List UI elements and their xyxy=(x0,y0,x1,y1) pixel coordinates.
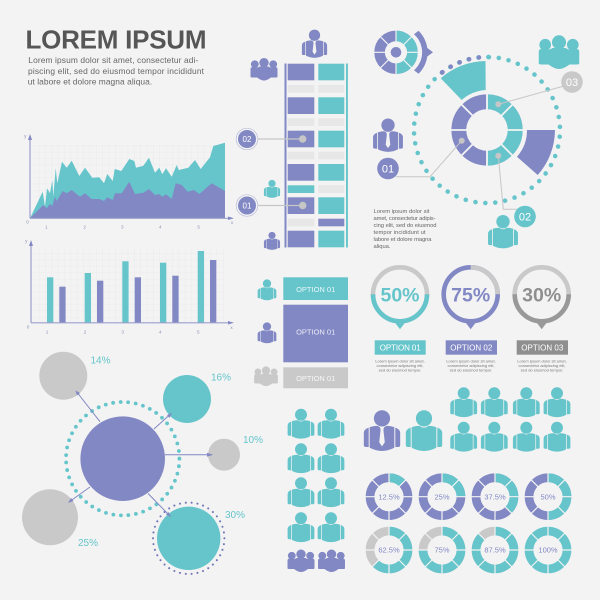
teal bars xyxy=(47,251,204,323)
percent labels: 16% xyxy=(211,372,231,384)
gauge 50%: 50% xyxy=(380,285,420,307)
option descriptions: Lorem ipsum dolor sit amet, xyxy=(517,358,567,364)
bubble chart xyxy=(22,352,263,574)
axis labels: 2 xyxy=(84,330,87,334)
icon: group above table xyxy=(250,58,278,80)
option descriptions xyxy=(375,358,567,372)
grey cells xyxy=(288,85,344,226)
donut 100%: 100% xyxy=(538,546,558,555)
donut 62.5% xyxy=(365,526,413,574)
bubble 14% xyxy=(39,352,87,400)
axis labels xyxy=(24,134,234,230)
arrows xyxy=(68,390,213,517)
option bar teal: OPTION 01 xyxy=(296,285,335,294)
donut 50% xyxy=(524,473,572,521)
paragraph: cing elit, sed do eiusmod xyxy=(374,223,436,229)
percent labels: 30% xyxy=(225,510,245,521)
gauge 75% xyxy=(444,267,498,329)
area chart xyxy=(24,134,234,230)
label option 02: OPTION 02 xyxy=(450,344,493,353)
callout 03: 03 xyxy=(566,77,578,89)
teal cells xyxy=(288,64,344,247)
table chart xyxy=(284,64,348,248)
axis labels: x xyxy=(231,220,234,225)
gauge 30% xyxy=(515,267,569,329)
callout 02 xyxy=(236,128,306,150)
axis labels: 0 xyxy=(27,324,30,330)
purple wedge xyxy=(517,130,555,175)
axis labels: 5 xyxy=(197,224,200,230)
axis labels: 3 xyxy=(121,330,124,334)
icon: target with arrow xyxy=(373,29,433,75)
dotted ring xyxy=(66,402,179,515)
teal area xyxy=(30,143,225,218)
paragraph: Lorem ipsum dolor sit xyxy=(374,209,430,215)
intro text xyxy=(28,55,205,86)
dotted ring purple xyxy=(153,503,224,574)
bubble 30% xyxy=(157,507,220,570)
axis labels: 1 xyxy=(46,330,49,334)
axis labels: 1 xyxy=(45,224,48,230)
paragraph: labore et dolore magna xyxy=(374,237,432,243)
gauge 50% xyxy=(373,267,427,329)
icon: suited person xyxy=(373,118,403,152)
option descriptions: sed do eiusmod tempor. xyxy=(521,368,563,372)
donut xyxy=(450,93,524,167)
donut 87.5%: 87.5% xyxy=(484,546,506,555)
callout 01 xyxy=(236,195,306,216)
paragraph xyxy=(374,209,436,250)
people column xyxy=(288,409,345,572)
donut 75% xyxy=(418,526,466,574)
option bar grey: OPTION 01 xyxy=(296,374,335,383)
icon: teal group xyxy=(539,35,579,69)
donut 37.5% xyxy=(471,473,519,521)
donut 25%: 25% xyxy=(434,492,450,501)
callout 01: 01 xyxy=(243,202,252,210)
option descriptions: sed do eiusmod tempor. xyxy=(450,368,492,372)
percent labels: 25% xyxy=(78,538,98,549)
icon: grey group xyxy=(254,366,278,386)
icon: manager above table xyxy=(302,30,327,58)
option descriptions: consectetur adipiscing elit, xyxy=(448,363,494,368)
donut 100% xyxy=(524,526,572,574)
option bars xyxy=(283,277,348,388)
option descriptions: Lorem ipsum dolor sit amet, xyxy=(375,358,425,364)
icon: teal person xyxy=(488,215,518,248)
axis labels: 2 xyxy=(83,224,86,230)
paragraph: tempor incididunt ut xyxy=(374,230,426,236)
axes xyxy=(30,138,230,218)
gauge 30%: 30% xyxy=(522,285,561,307)
option descriptions: consectetur adipiscing elit, xyxy=(519,363,565,368)
axis labels: x xyxy=(230,325,233,330)
dotted ring chart xyxy=(385,28,589,232)
percent labels: 14% xyxy=(90,356,111,366)
callout 02: 02 xyxy=(243,135,252,144)
bubble 10% xyxy=(208,439,240,471)
axes xyxy=(31,244,230,323)
donut 37.5%: 37.5% xyxy=(484,492,506,501)
option descriptions: sed do eiusmod tempor. xyxy=(379,368,421,372)
label option 03 xyxy=(517,340,568,355)
purple bars xyxy=(59,260,216,323)
paragraph: aliqua. xyxy=(374,244,391,250)
intro text: piscing elit, sed do eiusmod tempor incididunt xyxy=(28,66,205,76)
axis labels: y xyxy=(24,134,27,138)
percent labels xyxy=(78,356,263,549)
axis labels xyxy=(25,238,233,334)
gauge 75%: 75% xyxy=(451,285,490,307)
axis labels: 4 xyxy=(159,330,162,334)
icon: large suited person xyxy=(364,410,400,451)
donut 25% xyxy=(418,473,466,521)
donut 87.5% xyxy=(471,526,519,574)
label option 01 xyxy=(375,340,426,355)
icon: teal person xyxy=(258,279,276,300)
donut 62.5%: 62.5% xyxy=(378,546,400,555)
callout 01: 01 xyxy=(382,164,394,176)
label option 02 xyxy=(446,340,497,355)
bubble 25% xyxy=(22,489,78,545)
label option 03: OPTION 03 xyxy=(521,344,564,353)
donut 12.5%: 12.5% xyxy=(378,492,400,501)
donut 50%: 50% xyxy=(540,492,556,501)
axis labels: 4 xyxy=(159,224,162,230)
icon: large teal person xyxy=(406,410,442,451)
axis labels: 3 xyxy=(121,224,124,230)
callout 03 xyxy=(495,71,583,107)
axis labels: 5 xyxy=(197,330,200,334)
icon: purple person xyxy=(264,232,280,250)
intro text: ut labore et dolore magna aliqua. xyxy=(28,76,152,86)
title: LOREM IPSUM xyxy=(26,24,206,54)
icon: teal person xyxy=(264,180,280,198)
icon: purple person xyxy=(258,322,276,343)
purple area xyxy=(30,182,225,218)
donut 75%: 75% xyxy=(434,546,450,555)
axis labels: y xyxy=(25,238,28,244)
intro text: Lorem ipsum dolor sit amet, consectetur adi- xyxy=(28,55,199,65)
callout 02: 02 xyxy=(519,212,531,224)
center bubble xyxy=(80,416,165,501)
callout 01 xyxy=(377,138,465,179)
label option 01: OPTION 01 xyxy=(380,344,421,353)
people grid xyxy=(450,387,570,452)
percent labels: 10% xyxy=(243,435,263,446)
teal wedge xyxy=(441,61,486,100)
axis labels: 0 xyxy=(26,220,29,224)
bubble 16% xyxy=(163,375,211,423)
purple cells xyxy=(288,64,344,247)
option descriptions: consectetur adipiscing elit, xyxy=(377,363,423,368)
bar chart xyxy=(25,238,234,334)
paragraph: amet, consectetur adipis- xyxy=(374,216,436,222)
callout 02 xyxy=(495,153,536,227)
option bar purple: OPTION 01 xyxy=(296,328,335,337)
donut 12.5% xyxy=(365,473,413,521)
option descriptions: Lorem ipsum dolor sit amet, xyxy=(446,358,496,364)
